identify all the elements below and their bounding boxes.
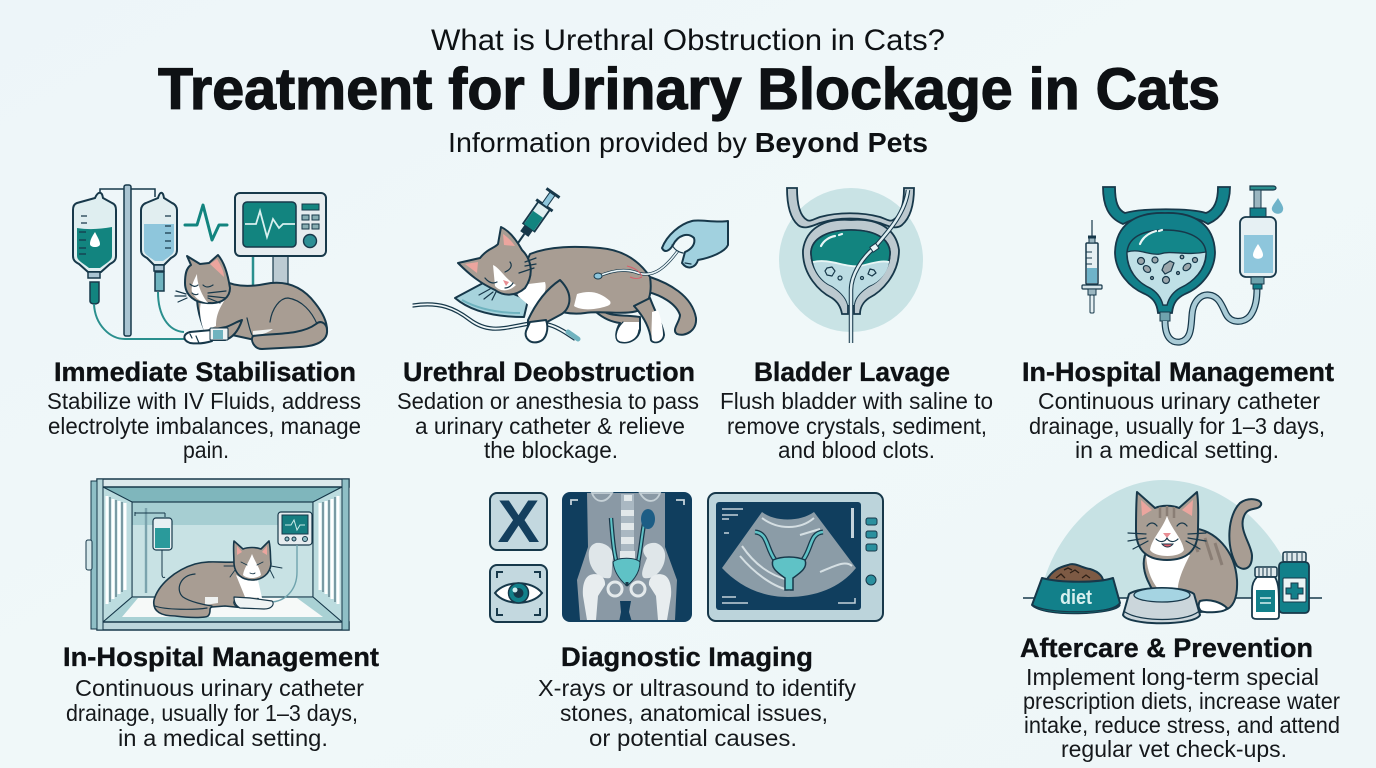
badge: X: X: [498, 488, 540, 555]
heading: Aftercare & Prevention: [1020, 633, 1313, 663]
header: titles: [158, 24, 1220, 158]
icon: happy cat with diet bowl, water bowl and medicine: [1023, 480, 1322, 623]
description: X-rays or ultrasound to identify: [538, 675, 856, 701]
description: intake, reduce stress, and attend: [1024, 712, 1340, 738]
description: drainage, usually for 1–3 days,: [66, 700, 358, 726]
icon: cat resting in kennel with drip and monitor: [86, 479, 349, 630]
icon: bladder with catheter on circle: [779, 188, 923, 343]
heading: Immediate Stabilisation: [54, 357, 356, 387]
ultrasound monitor: [708, 493, 883, 621]
panel: immediate stabilisation: [47, 185, 361, 463]
description: [47, 388, 361, 463]
description: or potential causes.: [589, 725, 797, 751]
icon: IV bags, monitor and resting cat: [73, 185, 327, 349]
panel: in-hospital management kennel: [63, 479, 379, 751]
badge: eye: [490, 565, 547, 622]
icon: bladder with stones, syringe and saline bottle: [1082, 186, 1283, 342]
description: Sedation or anesthesia to pass: [397, 388, 699, 414]
description: in a medical setting.: [1075, 437, 1279, 463]
panel: bladder lavage: [720, 188, 993, 463]
panel: aftercare and prevention: [1020, 480, 1340, 762]
panel: urethral deobstruction: [397, 187, 728, 463]
description: Stabilize with IV Fluids, address: [47, 388, 361, 414]
description: the blockage.: [484, 437, 618, 463]
question line: What is Urethral Obstruction in Cats?: [431, 24, 945, 57]
panel: in-hospital management top: [1022, 186, 1334, 463]
icon: X-ray badge, eye badge, X-ray image and ultrasound monitor: [490, 488, 883, 622]
heading: Urethral Deobstruction: [403, 357, 695, 387]
description: [1029, 388, 1325, 463]
panel: diagnostic imaging: [490, 488, 883, 751]
source line: Information provided by Beyond Pets: [448, 127, 928, 158]
description: stones, anatomical issues,: [560, 700, 828, 726]
description: a urinary catheter & relieve: [415, 413, 685, 439]
description: Continuous urinary catheter: [75, 675, 364, 701]
description: regular vet check-ups.: [1061, 736, 1287, 762]
description: [720, 388, 993, 463]
description: Flush bladder with saline to: [720, 388, 993, 414]
description: pain.: [183, 437, 229, 463]
description: remove crystals, sediment,: [727, 413, 987, 439]
description: Implement long-term special: [1026, 664, 1319, 690]
X-ray image: [562, 492, 692, 622]
heading: In-Hospital Management: [1022, 357, 1334, 387]
description: [538, 675, 856, 751]
icon: sedated cat with syringe and catheter: [413, 187, 728, 342]
heading: In-Hospital Management: [63, 642, 379, 672]
description: drainage, usually for 1–3 days,: [1029, 413, 1325, 439]
heading: Diagnostic Imaging: [561, 642, 813, 672]
description: prescription diets, increase water: [1023, 688, 1340, 714]
description: and blood clots.: [778, 437, 935, 463]
main title: Treatment for Urinary Blockage in Cats: [158, 57, 1220, 122]
heading: Bladder Lavage: [754, 357, 950, 387]
description: [1023, 664, 1340, 762]
icon: happy cat with diet bowl, water bowl and medicine: diet: [1060, 587, 1092, 609]
description: [397, 388, 699, 463]
description: in a medical setting.: [118, 725, 328, 751]
description: electrolyte imbalances, manage: [48, 413, 361, 439]
description: [66, 675, 364, 751]
description: Continuous urinary catheter: [1038, 388, 1320, 414]
